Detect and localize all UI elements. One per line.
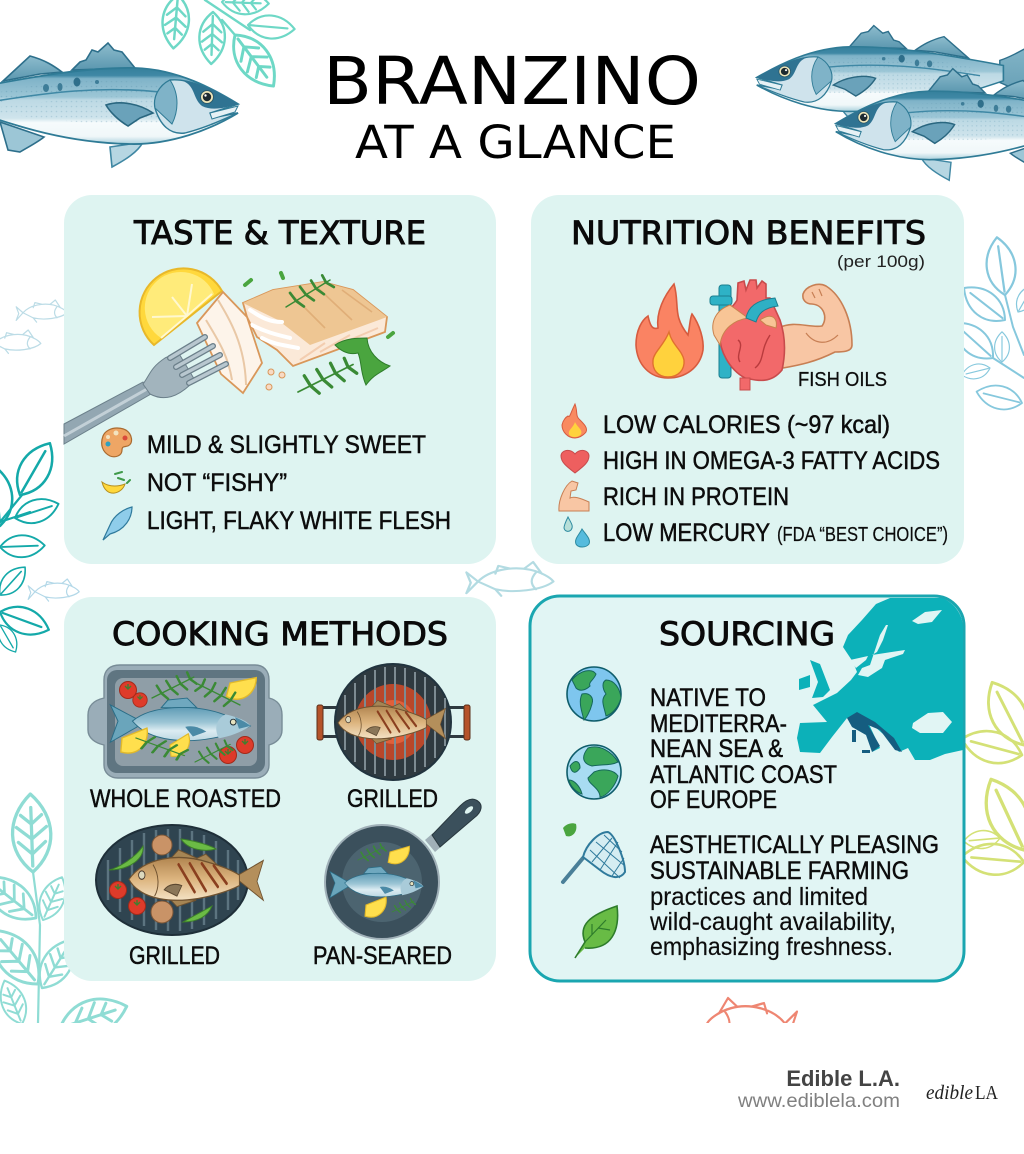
icon: heart [561,450,589,473]
title [323,43,701,169]
text: native range: NATIVE TO [650,684,766,712]
illustration: pan-seared fish in skillet [325,799,481,939]
icon: globe, Europe and Africa [567,745,621,799]
label: pan-seared: PAN-SEARED [313,942,452,970]
note: per 100g: (per 100g) [837,252,925,271]
map of Europe with Mediterranean highlighted [797,598,963,760]
heading: cooking methods: COOKING METHODS [112,615,448,653]
illustration: grilled fish with vegetables on oval grill [96,825,263,935]
text: sustainable farming: wild-caught availability, [649,908,896,936]
heading: sourcing: SOURCING [659,615,835,653]
decorative small fish: left [0,330,41,353]
decorative salmon fish, clipped at the page edge [706,996,798,1023]
fish illustration: top right back [757,26,1024,131]
text: native range: ATLANTIC COAST [650,761,837,789]
background leaves: top sprig [160,0,296,96]
list: nutrition benefits: RICH IN PROTEIN [603,483,789,511]
panel: sourcing [530,596,964,981]
footer: publisher name and site [737,1066,900,1112]
fish illustration: top right front [836,69,1024,180]
text: sustainable farming: AESTHETICALLY PLEASING [650,831,939,859]
panel: cooking methods [64,597,496,981]
icon: paint palette [102,428,132,457]
illustration: whole roasted fish in tray [88,665,282,778]
list: taste attributes: LIGHT, FLAKY WHITE FLESH [147,507,451,535]
icon: fishing net [563,823,625,882]
decorative small fish: upper left [16,300,67,322]
label: fish oils: FISH OILS [798,369,887,391]
panel: taste and texture [64,195,496,564]
list: nutrition benefits: (FDA “BEST CHOICE”) [777,524,948,546]
text: sustainable farming: SUSTAINABLE FARMING [650,857,909,885]
footer: publisher name and site: www.ediblela.com [737,1090,900,1112]
icon: green leaf [575,906,618,958]
label: grilled, round grill: GRILLED [347,785,438,813]
label: whole roasted: WHOLE ROASTED [90,785,281,813]
footer: logo: LA [975,1082,998,1104]
panel: nutrition benefits [531,195,964,564]
heading: taste and texture: TASTE & TEXTURE [133,214,426,252]
heading: nutrition benefits: NUTRITION BENEFITS [571,214,926,252]
footer: logo: edible [926,1082,973,1104]
icon: citrus and herb [102,472,130,493]
background leaves: lower left sprig [0,792,128,1023]
footer: publisher name and site: Edible L.A. [786,1066,900,1091]
illustration: grilled fish on round grill [317,664,470,780]
text: native range [650,684,837,814]
illustration: flame, heart and flexed arm [636,280,852,390]
label: grilled, oval grill: GRILLED [129,942,220,970]
decorative small fish: lower left [28,579,79,601]
text: sustainable farming: practices and limited [650,883,868,911]
list: taste attributes [102,428,451,540]
background leaves: left teal sprig [0,436,63,656]
list: nutrition benefits: LOW MERCURY [603,519,770,547]
title: BRANZINO [323,43,701,120]
illustration: fork with flaked fish, lemon and herbs [64,268,393,444]
icon: flexed arm [559,481,589,511]
background leaves: right blue sprig [946,235,1024,414]
text: sustainable farming [649,831,939,961]
text: sustainable farming: emphasizing freshness. [650,933,893,961]
icon: small flame [562,404,587,438]
text: native range: NEAN SEA & [650,735,783,763]
text: native range: OF EUROPE [650,786,777,814]
fish illustration: top left [0,43,238,167]
title: AT A GLANCE [355,116,676,169]
list: nutrition benefits: HIGH IN OMEGA-3 FATTY ACIDS [603,447,940,475]
decorative small fish: center [466,562,553,596]
footer: logo [926,1082,998,1104]
text: native range: MEDITERRA- [650,710,787,738]
list: taste attributes: MILD & SLIGHTLY SWEET [147,431,426,459]
icon: feather [103,507,132,540]
icon: globe, Americas [567,667,621,721]
list: nutrition benefits [559,404,948,547]
icon: water drops [564,517,589,547]
list: nutrition benefits: LOW CALORIES (~97 kcal) [603,411,890,439]
list: taste attributes: NOT “FISHY” [147,469,287,497]
background leaves: right yellow sprig [958,675,1024,877]
